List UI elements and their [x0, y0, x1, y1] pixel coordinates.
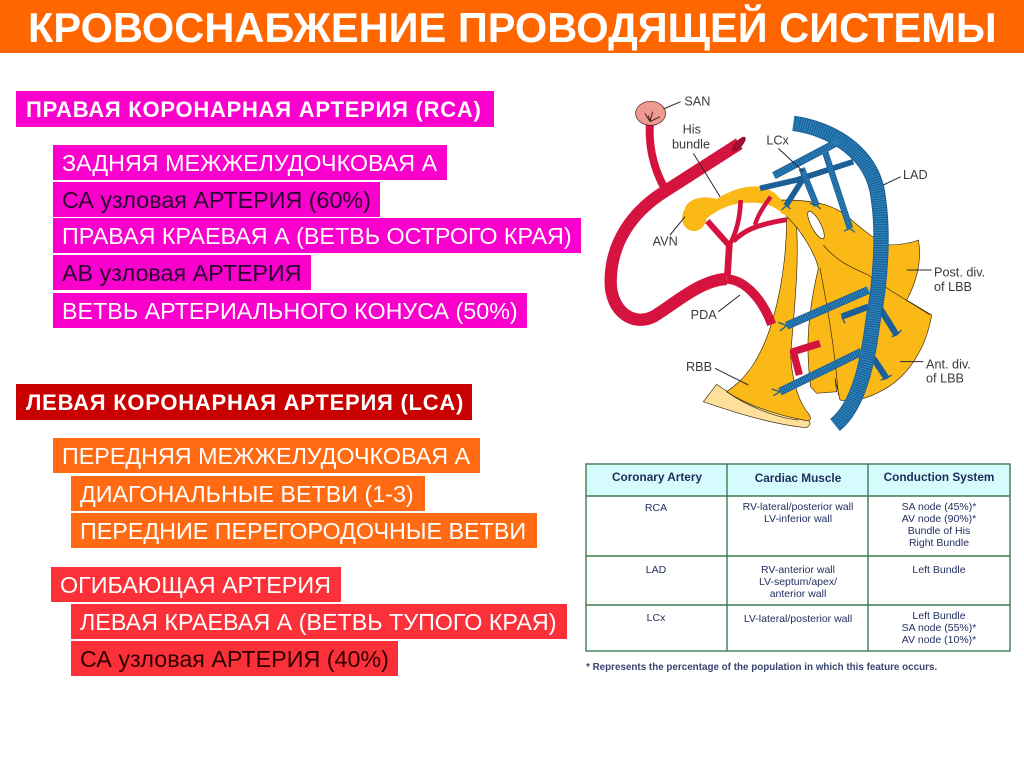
table header background	[586, 464, 1010, 496]
table text: Cardiac Muscle	[755, 471, 842, 485]
blue left coronary artery	[760, 123, 902, 425]
table text: Left Bundle	[912, 610, 966, 622]
heading: LCA: ЛЕВАЯ КОРОНАРНАЯ АРТЕРИЯ (LCA)	[26, 390, 464, 415]
table text: LCx	[647, 612, 666, 624]
table text: LAD	[646, 564, 667, 576]
diagram labels: LCx	[766, 133, 790, 147]
diagram labels: of LBB	[934, 280, 972, 294]
item: right marginal: ПРАВАЯ КРАЕВАЯ А (ВЕТВЬ ОСТРОГО КРАЯ)	[62, 223, 572, 249]
diagram labels: Ant. div.	[926, 357, 971, 371]
item: conus branch 50%: ВЕТВЬ АРТЕРИАЛЬНОГО КОНУСА (50%)	[62, 298, 518, 324]
table text: Coronary Artery	[612, 470, 702, 484]
heading: RCA	[16, 91, 494, 127]
table text: AV node (90%)*	[902, 513, 976, 525]
item: AV node artery	[53, 255, 311, 290]
table text: Conduction System	[884, 470, 994, 484]
table text	[612, 470, 994, 646]
table text: LV-inferior wall	[764, 513, 832, 525]
table text: LV-septum/apex/	[759, 576, 837, 588]
item: anterior interventricular: ПЕРЕДНЯЯ МЕЖЖЕЛУДОЧКОВАЯ А	[62, 443, 470, 469]
item: SA node artery 60%: СА узловая АРТЕРИЯ (60%)	[62, 187, 371, 213]
diagram labels	[653, 95, 985, 386]
diagram labels: LAD	[903, 168, 928, 182]
table text: Left Bundle	[912, 564, 966, 576]
red right coronary artery	[611, 122, 820, 375]
yellow conduction tissue	[682, 186, 932, 428]
diagram labels: of LBB	[926, 372, 964, 386]
item: anterior septal branches: ПЕРЕДНИЕ ПЕРЕГОРОДОЧНЫЕ ВЕТВИ	[80, 518, 526, 544]
item: circumflex artery	[51, 567, 341, 602]
table text: RCA	[645, 502, 667, 514]
SA node	[636, 101, 666, 125]
title: КРОВОСНАБЖЕНИЕ ПРОВОДЯЩЕЙ СИСТЕМЫ	[28, 4, 997, 51]
table text: SA node (45%)*	[902, 501, 976, 513]
item: diagonal branches: ДИАГОНАЛЬНЫЕ ВЕТВИ (1-3)	[80, 481, 414, 507]
diagram labels: His	[683, 123, 701, 137]
coronary supply table	[585, 463, 1011, 673]
diagram labels: RBB	[686, 360, 712, 374]
panel: left coronary artery list	[16, 384, 567, 676]
panel: right coronary artery list	[16, 91, 581, 328]
item: left marginal: ЛЕВАЯ КРАЕВАЯ А (ВЕТВЬ ТУПОГО КРАЯ)	[80, 609, 557, 635]
table footnote: * Represents the percentage of the population in which this feature occurs.	[586, 662, 937, 673]
diagram labels: Post. div.	[934, 265, 985, 279]
item: circumflex artery: ОГИБАЮЩАЯ АРТЕРИЯ	[60, 572, 331, 598]
diagram labels: PDA	[691, 308, 717, 322]
table text: RV-anterior wall	[761, 564, 835, 576]
table grid	[586, 464, 1010, 651]
heart conduction system diagram	[604, 95, 985, 431]
heading: RCA: ПРАВАЯ КОРОНАРНАЯ АРТЕРИЯ (RCA)	[26, 97, 482, 122]
table text: SA node (55%)*	[902, 622, 976, 634]
table text: LV-lateral/posterior wall	[744, 613, 852, 625]
diagram labels: AVN	[653, 235, 678, 249]
heading: LCA	[16, 384, 472, 420]
table text: Bundle of His	[908, 525, 970, 537]
diagram leader lines	[663, 102, 932, 385]
diagram labels: SAN	[684, 95, 710, 109]
item: SA node artery 40%: СА узловая АРТЕРИЯ (40%)	[80, 646, 389, 672]
item: AV node artery: АВ узловая АРТЕРИЯ	[62, 260, 302, 286]
table text: Right Bundle	[909, 537, 969, 549]
diagram labels: bundle	[672, 137, 710, 151]
item: posterior interventricular: ЗАДНЯЯ МЕЖЖЕЛУДОЧКОВАЯ А	[62, 150, 437, 176]
table text: anterior wall	[770, 588, 826, 600]
table text: AV node (10%)*	[902, 634, 976, 646]
table text: RV-lateral/posterior wall	[743, 501, 853, 513]
